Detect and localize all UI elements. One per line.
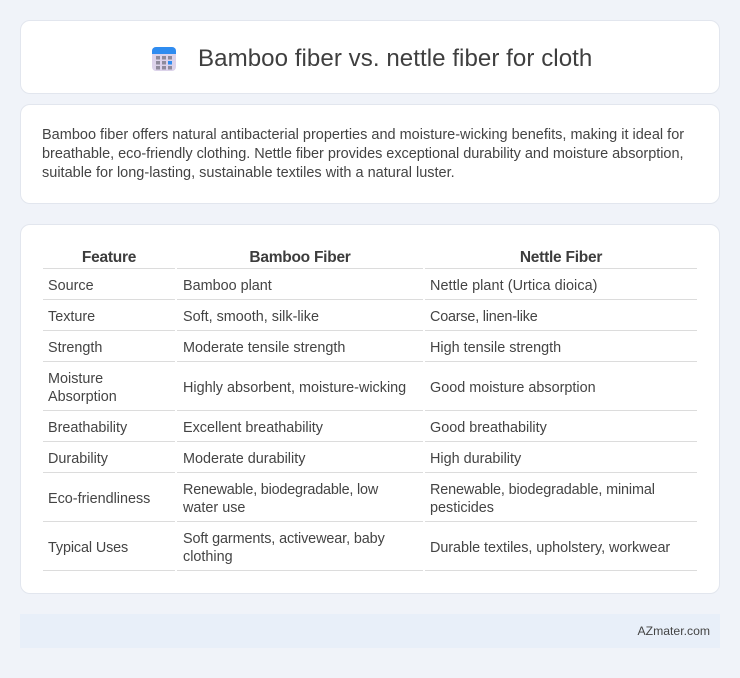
- comparison table: Eco-friendliness: [48, 491, 150, 507]
- row: Texture: [48, 309, 538, 325]
- intro paragraph: breathable, eco-friendly clothing. Nettle fiber provides exceptional durability and moisture absorption,: [42, 146, 683, 162]
- row: Strength: [48, 340, 561, 356]
- comparison table: Highly absorbent, moisture-wicking: [183, 380, 406, 396]
- footer credit: AZmater.com: [638, 624, 710, 638]
- comparison table: Moderate durability: [183, 451, 305, 467]
- comparison table: clothing: [183, 549, 233, 565]
- comparison table: Soft garments, activewear, baby: [183, 531, 385, 547]
- row: Moisture Absorption: [48, 371, 596, 405]
- comparison table: Typical Uses: [48, 540, 128, 556]
- comparison table: Good breathability: [430, 420, 547, 436]
- row: Breathability: [48, 420, 547, 436]
- intro paragraph: suitable for long-lasting, sustainable textiles with a natural luster.: [42, 165, 455, 181]
- intro paragraph: [42, 127, 684, 181]
- title: Bamboo fiber vs. nettle fiber for cloth: [198, 45, 592, 72]
- intro paragraph: Bamboo fiber offers natural antibacterial properties and moisture-wicking benefits, making it ideal for: [42, 127, 684, 143]
- comparison table: Excellent breathability: [183, 420, 323, 436]
- comparison table: Bamboo plant: [183, 278, 272, 294]
- header: Nettle Fiber: Nettle Fiber: [520, 249, 602, 266]
- comparison table: Coarse, linen-like: [430, 309, 538, 325]
- row: Source: [48, 278, 598, 294]
- comparison table: water use: [183, 500, 245, 516]
- header: Bamboo Fiber: Bamboo Fiber: [249, 249, 351, 266]
- row: Durability: [48, 451, 522, 467]
- comparison table: High durability: [430, 451, 521, 467]
- comparison table: Absorption: [48, 389, 117, 405]
- comparison table: Renewable, biodegradable, minimal: [430, 482, 655, 498]
- comparison table: Breathability: [48, 420, 127, 436]
- row: Eco-friendliness: [48, 482, 655, 516]
- comparison table: Soft, smooth, silk-like: [183, 309, 319, 325]
- comparison table: Source: [48, 278, 94, 294]
- comparison table: Nettle plant (Urtica dioica): [430, 278, 598, 294]
- comparison table: Good moisture absorption: [430, 380, 596, 396]
- comparison table: Moderate tensile strength: [183, 340, 345, 356]
- comparison table: Moisture: [48, 371, 103, 387]
- comparison table: Durable textiles, upholstery, workwear: [430, 540, 670, 556]
- comparison table: Durability: [48, 451, 108, 467]
- comparison table: High tensile strength: [430, 340, 561, 356]
- footer bar: [20, 614, 720, 648]
- comparison table: Renewable, biodegradable, low: [183, 482, 378, 498]
- comparison table card: [20, 224, 720, 594]
- row: Typical Uses: [48, 531, 670, 565]
- comparison table: Strength: [48, 340, 102, 356]
- intro text card: [20, 104, 720, 204]
- comparison table: pesticides: [430, 500, 494, 516]
- title card: [20, 20, 720, 94]
- icon: calendar: [152, 47, 176, 71]
- comparison table: Texture: [48, 309, 95, 325]
- header: Feature: Feature: [82, 249, 136, 266]
